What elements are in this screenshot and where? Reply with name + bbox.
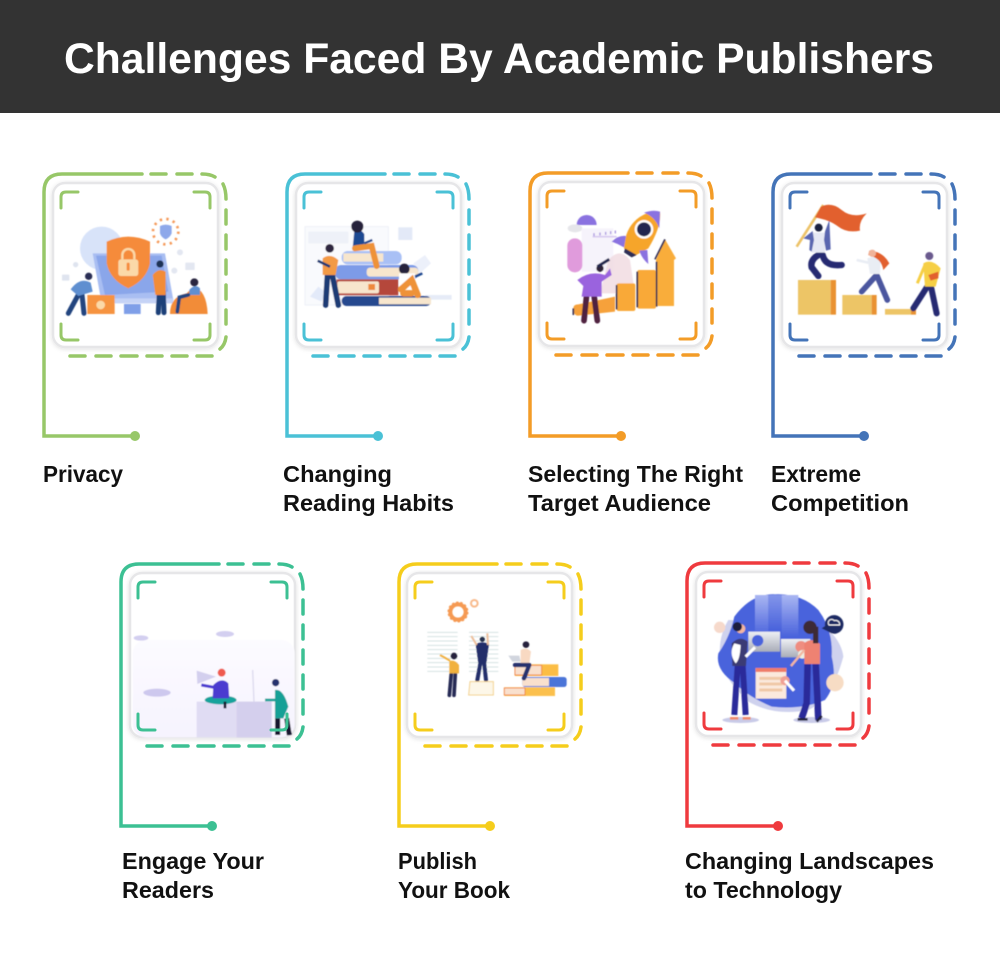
image card [296, 183, 461, 347]
label: Changing Landscapes [685, 848, 934, 874]
label: Competition [771, 490, 909, 516]
image card [53, 183, 218, 347]
panel: selecting the right target audience [528, 173, 743, 516]
illustration: team building a book [427, 600, 567, 696]
card frame [44, 174, 226, 441]
label: Engage Your [122, 848, 264, 874]
label: Changing [283, 461, 392, 487]
corner brackets [415, 582, 564, 730]
title banner [0, 0, 1000, 113]
label: Extreme [771, 461, 861, 487]
image card [782, 183, 947, 347]
panel: publish your book [398, 564, 581, 903]
panel: changing reading habits [283, 174, 469, 516]
panel: privacy [43, 174, 226, 487]
illustration: readers on a stack of books [305, 221, 452, 306]
panel: extreme competition [771, 174, 955, 516]
corner brackets [790, 192, 939, 340]
card frame [399, 564, 581, 831]
label: Publish [398, 848, 477, 874]
corner brackets [138, 582, 287, 730]
card frame [530, 173, 712, 441]
corner brackets [547, 191, 696, 339]
image card [539, 182, 704, 346]
title banner: Challenges Faced By Academic Publishers [64, 35, 934, 83]
image card [407, 573, 572, 737]
corner brackets [304, 192, 453, 340]
panel: engage your readers [121, 564, 303, 903]
card frame [687, 563, 869, 831]
label: Target Audience [528, 490, 711, 516]
corner brackets [704, 581, 853, 729]
image card [696, 572, 861, 736]
illustration: rocket and growth bars [567, 211, 676, 321]
label: Your Book [398, 877, 510, 903]
card frame [287, 174, 469, 441]
illustration: speaker on a rooftop with listener [133, 631, 295, 737]
panel: changing landscapes to technology [685, 563, 934, 903]
illustration: people with digital screens [714, 594, 844, 723]
label: Readers [122, 877, 214, 903]
illustration: people climbing steps with flag [797, 205, 941, 315]
corner brackets [61, 192, 210, 340]
label: Privacy [43, 461, 123, 487]
image card [130, 573, 295, 737]
card frame [121, 564, 303, 831]
label: Selecting The Right [528, 461, 743, 487]
label: to Technology [685, 877, 842, 903]
card frame [773, 174, 955, 441]
illustration: security shield and people [62, 219, 208, 314]
label: Reading Habits [283, 490, 454, 516]
